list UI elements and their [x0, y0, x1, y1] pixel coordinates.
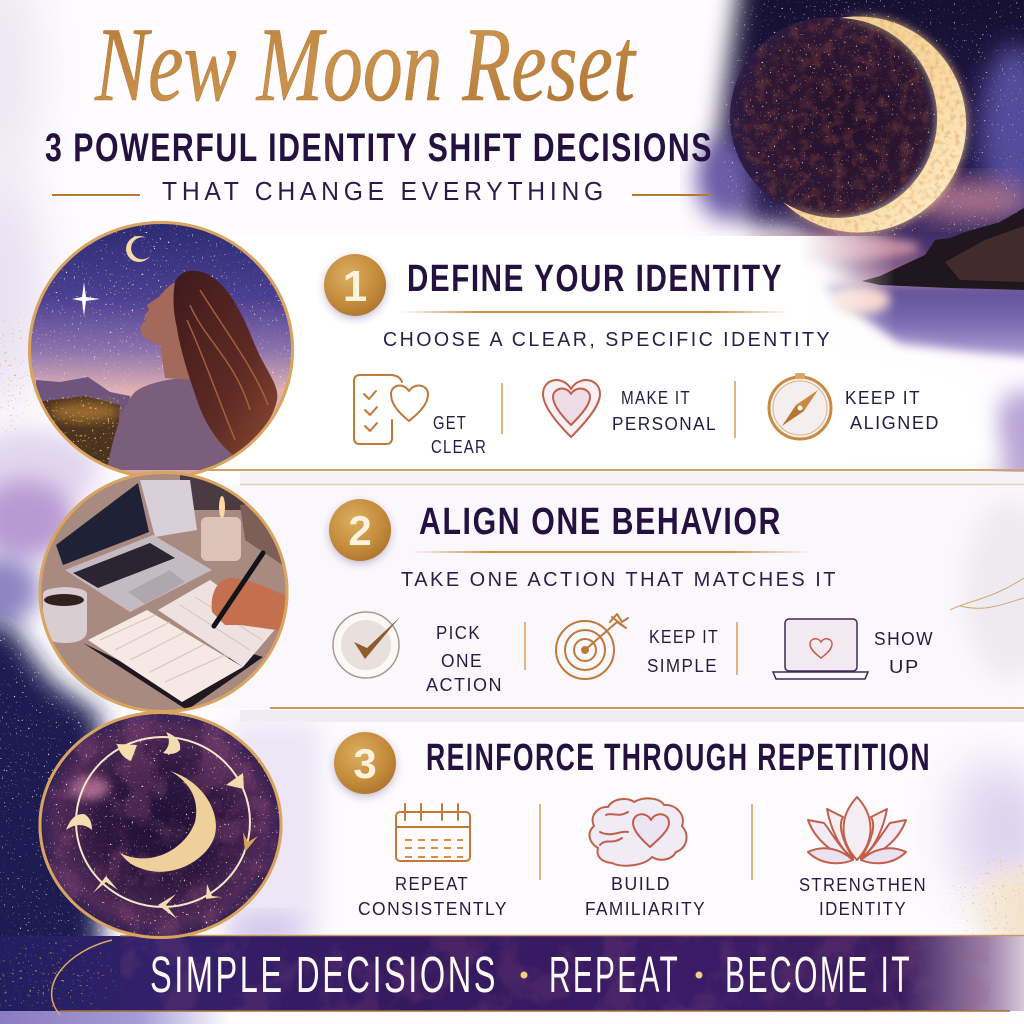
pen	[214, 553, 263, 626]
illustration: journaling at desk	[38, 470, 290, 715]
label: show up: SHOW	[874, 629, 934, 649]
icon: target with arrow	[556, 614, 628, 679]
crescent	[120, 771, 216, 872]
night sky scene	[680, 0, 1024, 363]
label: make it personal	[612, 388, 717, 434]
illustration: moon cycle	[38, 710, 284, 940]
icon: checklist with heart	[354, 375, 428, 444]
label: build familiarity	[585, 874, 706, 919]
notebook	[83, 643, 263, 710]
moon phase ring	[66, 732, 258, 919]
label: pick one action	[426, 623, 503, 695]
number badge 2: 2	[348, 507, 372, 554]
label: strengthen identity: IDENTITY	[819, 899, 907, 919]
icon: compass	[769, 373, 831, 439]
label: make it personal: PERSONAL	[612, 414, 717, 434]
subheading: TAKE ONE ACTION THAT MATCHES IT	[401, 569, 838, 591]
label: pick one action: PICK	[436, 623, 481, 643]
icon: lotus	[808, 797, 906, 863]
label: keep it simple	[647, 627, 719, 676]
subtitle heading: 3 POWERFUL IDENTITY SHIFT DECISIONS	[45, 126, 713, 170]
label: keep it aligned	[845, 388, 940, 433]
banner text: SIMPLE DECISIONS	[150, 946, 498, 1003]
number badge 1: 1	[343, 262, 367, 311]
subheading: CHOOSE A CLEAR, SPECIFIC IDENTITY	[383, 329, 832, 351]
icon: calendar	[396, 804, 470, 861]
label: show up	[874, 629, 934, 677]
panel 2: align one behavior	[38, 470, 934, 715]
label: keep it aligned: ALIGNED	[850, 413, 940, 433]
heading: DEFINE YOUR IDENTITY	[407, 258, 783, 300]
label: repeat consistently	[358, 874, 508, 919]
illustration: woman under the moon	[28, 220, 294, 480]
icon: laptop with heart	[773, 619, 868, 679]
water	[820, 285, 1024, 360]
label: keep it simple: KEEP IT	[649, 627, 719, 647]
label: strengthen identity	[799, 875, 927, 919]
label: get clear	[431, 413, 487, 457]
label: pick one action: ACTION	[426, 675, 503, 695]
number badge 2	[329, 499, 391, 561]
heading: ALIGN ONE BEHAVIOR	[419, 501, 782, 543]
label: pick one action: ONE	[441, 651, 483, 671]
label: keep it aligned: KEEP IT	[845, 388, 921, 408]
icon: brain with heart	[589, 798, 687, 866]
dark moon disc	[730, 17, 930, 217]
number badge 1	[324, 254, 386, 316]
cup	[43, 587, 87, 643]
label: build familiarity: FAMILIARITY	[585, 899, 706, 919]
label: repeat consistently: CONSISTENTLY	[358, 899, 508, 919]
number badge 3: 3	[353, 740, 377, 787]
label: keep it simple: SIMPLE	[647, 656, 718, 676]
shoreline hill	[862, 208, 1024, 290]
label: make it personal: MAKE IT	[621, 388, 691, 408]
panel 1: define your identity	[28, 220, 940, 480]
hand	[212, 578, 290, 632]
divider	[410, 551, 810, 553]
candle	[201, 517, 241, 561]
crescent moon	[780, 15, 970, 235]
title: New Moon Reset	[94, 6, 637, 123]
label: get clear: CLEAR	[431, 437, 487, 457]
icon: check mark	[333, 612, 400, 678]
panel 3: reinforce through repetition	[38, 710, 931, 940]
footer banner	[0, 920, 1024, 1024]
label: show up: UP	[889, 657, 920, 677]
divider	[400, 311, 790, 313]
icon: heart	[543, 380, 600, 437]
panel backgrounds	[0, 236, 1024, 944]
label: repeat consistently: REPEAT	[395, 874, 469, 894]
number badge 3	[334, 732, 396, 794]
label: get clear: GET	[433, 413, 467, 433]
laptop	[56, 483, 149, 565]
label: build familiarity: BUILD	[611, 874, 671, 894]
banner text: REPEAT	[549, 946, 680, 1003]
subtitle second line: THAT CHANGE EVERYTHING	[162, 176, 608, 206]
label: strengthen identity: STRENGTHEN	[799, 875, 927, 895]
